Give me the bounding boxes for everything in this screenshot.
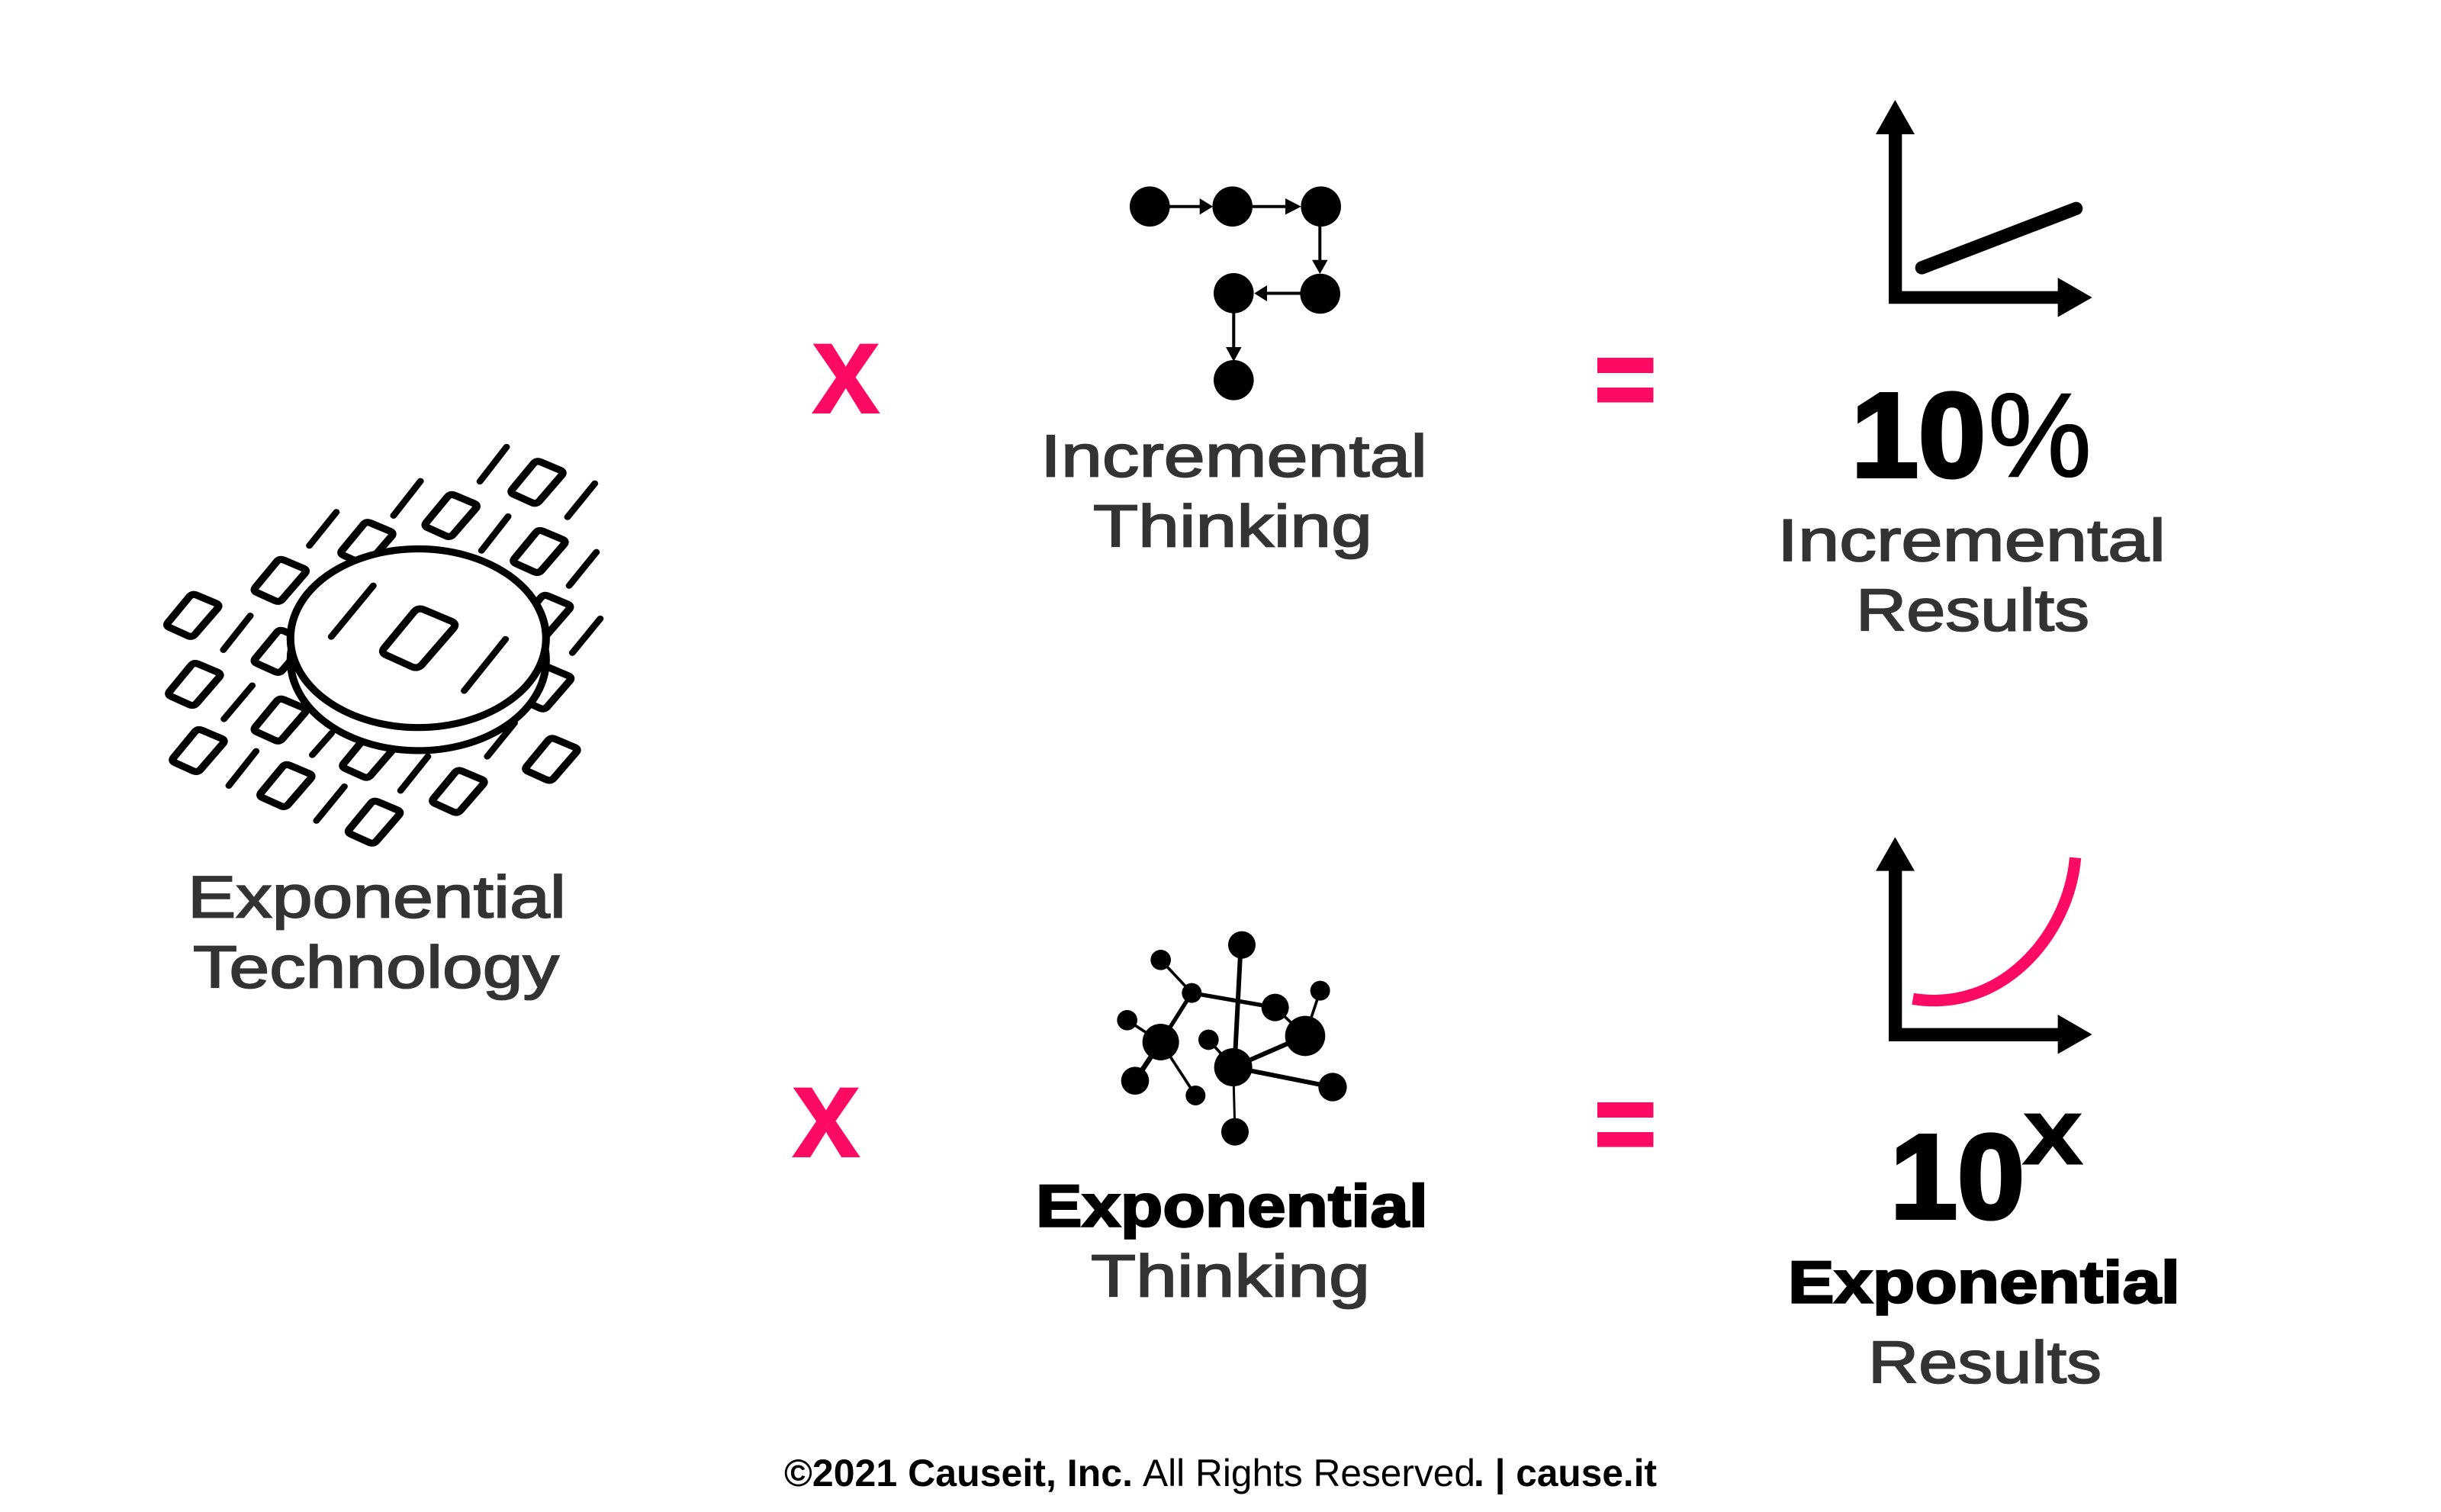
- label: exponential technology: Technology: [193, 934, 559, 1001]
- result: 10 percent: %: [1988, 369, 2092, 502]
- panel: top row equation: [811, 100, 2166, 644]
- result: 10 percent: 10: [1851, 369, 1986, 502]
- label: exponential technology: Exponential: [188, 864, 566, 931]
- label: exponential technology: [188, 864, 566, 1001]
- footer: copyright: ©2021 Causeit, Inc.: [784, 1452, 1133, 1494]
- result: 10 to the x: 10: [1890, 1111, 2025, 1243]
- footer: copyright: All Rights Reserved: [1143, 1452, 1475, 1494]
- equals sign bottom: [1597, 1102, 1654, 1147]
- panel: bottom row equation: [791, 837, 2180, 1396]
- label: incremental results: Results: [1856, 577, 2089, 644]
- multiply sign bottom: x: [791, 1037, 861, 1185]
- result: 10 to the x: [1890, 1099, 2082, 1243]
- label: exponential thinking: Thinking: [1091, 1242, 1370, 1309]
- result: 10 to the x: X: [2024, 1099, 2082, 1179]
- label: exponential results: [1788, 1248, 2180, 1396]
- footer: copyright: [784, 1452, 1657, 1495]
- label: exponential thinking: Exponential: [1036, 1172, 1428, 1239]
- label: incremental results: Incremental: [1777, 507, 2166, 574]
- icon: chip on data grid: [167, 447, 600, 843]
- equals sign top: [1597, 358, 1654, 403]
- icon: exponential network: [1117, 931, 1347, 1146]
- chart: linear growth: [1876, 100, 2092, 317]
- label: incremental thinking: Thinking: [1093, 493, 1372, 560]
- footer: copyright: . | cause.it: [1474, 1452, 1657, 1495]
- label: incremental results: [1777, 507, 2166, 644]
- label: exponential results: Results: [1868, 1329, 2102, 1396]
- icon: incremental step chain: [1130, 186, 1341, 401]
- label: incremental thinking: [1040, 423, 1427, 560]
- label: exponential thinking: [1036, 1172, 1428, 1309]
- result: 10 percent: [1851, 369, 2092, 502]
- panel: exponential technology: [167, 447, 600, 1001]
- label: incremental thinking: Incremental: [1040, 423, 1427, 490]
- multiply sign top: x: [811, 294, 881, 442]
- label: exponential results: Exponential: [1788, 1248, 2180, 1315]
- chart: exponential growth: [1876, 837, 2092, 1054]
